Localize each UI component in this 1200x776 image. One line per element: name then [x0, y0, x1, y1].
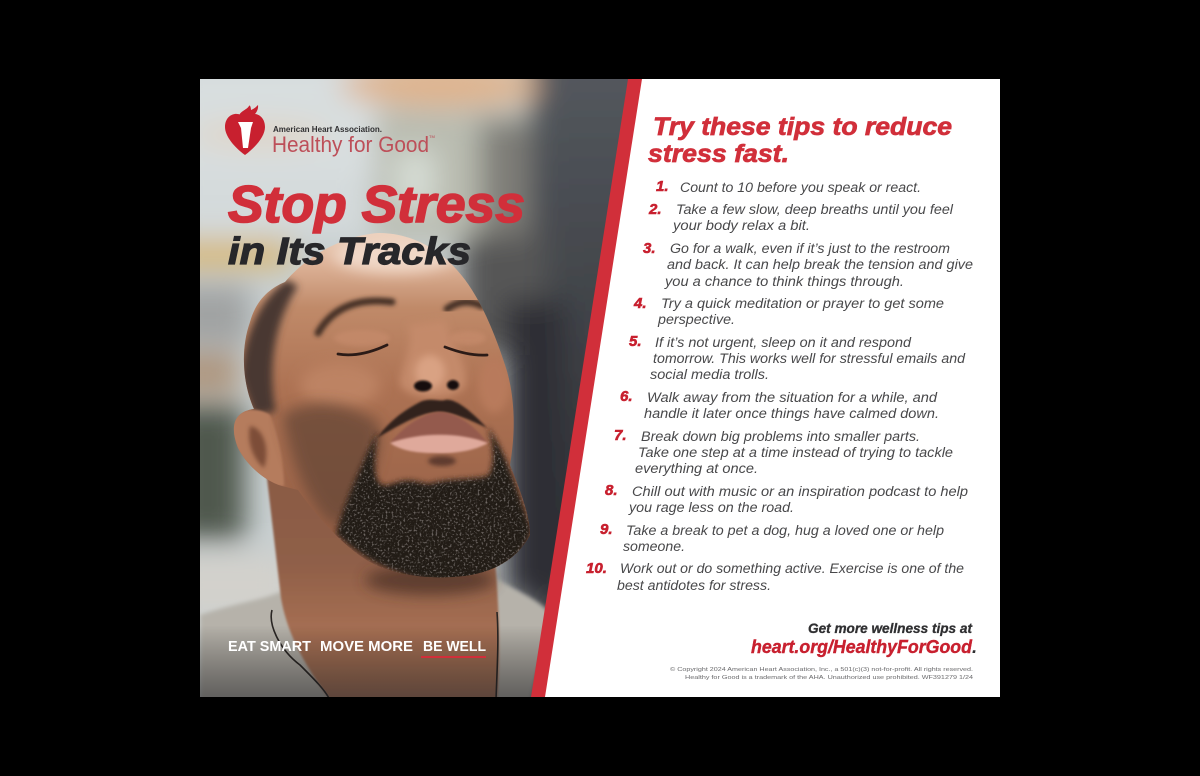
icon: heart and torch — [225, 105, 265, 155]
photo: nose — [400, 320, 466, 398]
tip 8: 8. — [605, 482, 618, 499]
photo: bottom dark gradient — [200, 631, 541, 697]
tip 5 — [629, 333, 966, 382]
tagline: red underline — [421, 656, 486, 658]
panel: photo of man with closed eyes — [200, 79, 628, 697]
tip 3: 3. — [643, 240, 656, 257]
tip 4: perspective. — [657, 312, 735, 327]
tip 4: Try a quick meditation or prayer to get some — [661, 296, 944, 311]
tip 8 — [605, 482, 969, 515]
tip 10: best antidotes for stress. — [617, 578, 771, 593]
tip 9: someone. — [623, 539, 685, 554]
logo: programme name: Healthy for Good — [272, 132, 429, 157]
photo: stubble on the cheek — [282, 404, 380, 525]
photo: ear — [231, 410, 284, 486]
photo: cheek highlights — [302, 367, 378, 405]
tip 10: Work out or do something active. Exercise is one of the — [620, 561, 964, 576]
tagline — [228, 639, 486, 658]
call to action: period: . — [972, 636, 977, 657]
tip 5: social media trolls. — [650, 367, 769, 382]
tip 4 — [633, 295, 944, 327]
tip 10 — [586, 560, 964, 593]
tip 2 — [648, 201, 954, 233]
photo: scalp hair — [241, 280, 298, 415]
tip 4: 4. — [633, 295, 647, 312]
title line 1: Stop Stress — [228, 176, 525, 234]
tip 8: Chill out with music or an inspiration podcast to help — [632, 484, 969, 499]
tagline: eat smart: EAT SMART — [228, 639, 311, 655]
red diagonal band — [531, 79, 642, 697]
tip 2: your body relax a bit. — [672, 218, 810, 233]
photo: chin shadow — [428, 456, 456, 466]
photo: blurred street background — [200, 79, 628, 697]
tip 8: you rage less on the road. — [628, 500, 794, 515]
tip 2: Take a few slow, deep breaths until you feel — [676, 202, 954, 217]
photo: nostrils — [414, 380, 432, 392]
logo: American Heart Association Healthy for Good — [225, 105, 435, 157]
tips heading — [648, 113, 952, 168]
tip 3: you a chance to think things through. — [664, 274, 904, 289]
title line 2: in Its Tracks — [228, 231, 471, 273]
photo: closed eyes — [338, 345, 387, 355]
copyright line 2: Healthy for Good is a trademark of the AHA. Unauthorized use prohibited. WF391279 1/24 — [685, 675, 974, 681]
tip 3: and back. It can help break the tension and give — [667, 257, 973, 272]
photo: neck and chest — [266, 470, 499, 700]
photo: shadow below the beard — [365, 565, 495, 595]
photo: eyelids — [338, 334, 386, 344]
tip 1: Count to 10 before you speak or react. — [680, 180, 921, 195]
photo: moustache — [377, 400, 487, 438]
tip 9: Take a break to pet a dog, hug a loved one or help — [626, 523, 945, 538]
copyright notice — [670, 666, 974, 681]
photo: shirt — [200, 578, 552, 700]
tip 3: Go for a walk, even if it’s just to the restroom — [670, 241, 950, 256]
title — [228, 176, 525, 273]
tip 7: 7. — [614, 427, 627, 444]
photo: beard — [336, 426, 532, 582]
tip 2: 2. — [648, 201, 662, 218]
tip 5: tomorrow. This works well for stressful emails and — [653, 351, 966, 366]
call to action: url: heart.org/HealthyForGood — [751, 636, 973, 657]
tip 7: Take one step at a time instead of trying to tackle — [638, 445, 953, 460]
copyright line 1: © Copyright 2024 American Heart Association, Inc., a 501(c)(3) not-for-profit. All rights reserved. — [670, 666, 973, 673]
tip 10: 10. — [586, 560, 607, 577]
tip 6: Walk away from the situation for a while, and — [647, 390, 938, 405]
tip 6: handle it later once things have calmed down. — [644, 406, 939, 421]
call to action — [751, 621, 977, 657]
tip 9 — [600, 521, 945, 554]
tagline: move more: MOVE MORE — [320, 639, 413, 655]
logo: parent organisation name: American Heart Association. — [273, 125, 382, 134]
tip 7: everything at once. — [635, 461, 758, 476]
photo: forehead highlight — [333, 237, 457, 273]
tip 5: If it’s not urgent, sleep on it and respond — [655, 335, 912, 350]
call to action: lead-in: Get more wellness tips at — [808, 621, 972, 636]
tips list — [586, 178, 973, 593]
tip 6 — [620, 388, 939, 421]
photo: head — [225, 230, 535, 582]
logo: trademark: TM — [429, 134, 435, 139]
tip 1: 1. — [656, 178, 669, 195]
tip 3 — [643, 240, 973, 289]
tip 5: 5. — [629, 333, 642, 350]
tip 9: 9. — [600, 521, 613, 538]
infographic card — [200, 79, 1000, 697]
photo: necklace — [271, 610, 498, 700]
tagline: be well: BE WELL — [423, 639, 486, 655]
heading line 2: stress fast. — [648, 140, 789, 168]
tip 6: 6. — [620, 388, 633, 405]
tip 7 — [614, 427, 953, 476]
tip 7: Break down big problems into smaller parts. — [641, 429, 920, 444]
heading line 1: Try these tips to reduce — [653, 113, 952, 141]
photo: brows — [318, 301, 392, 333]
panel: white card background — [200, 79, 1000, 697]
photo: lips — [390, 412, 488, 443]
